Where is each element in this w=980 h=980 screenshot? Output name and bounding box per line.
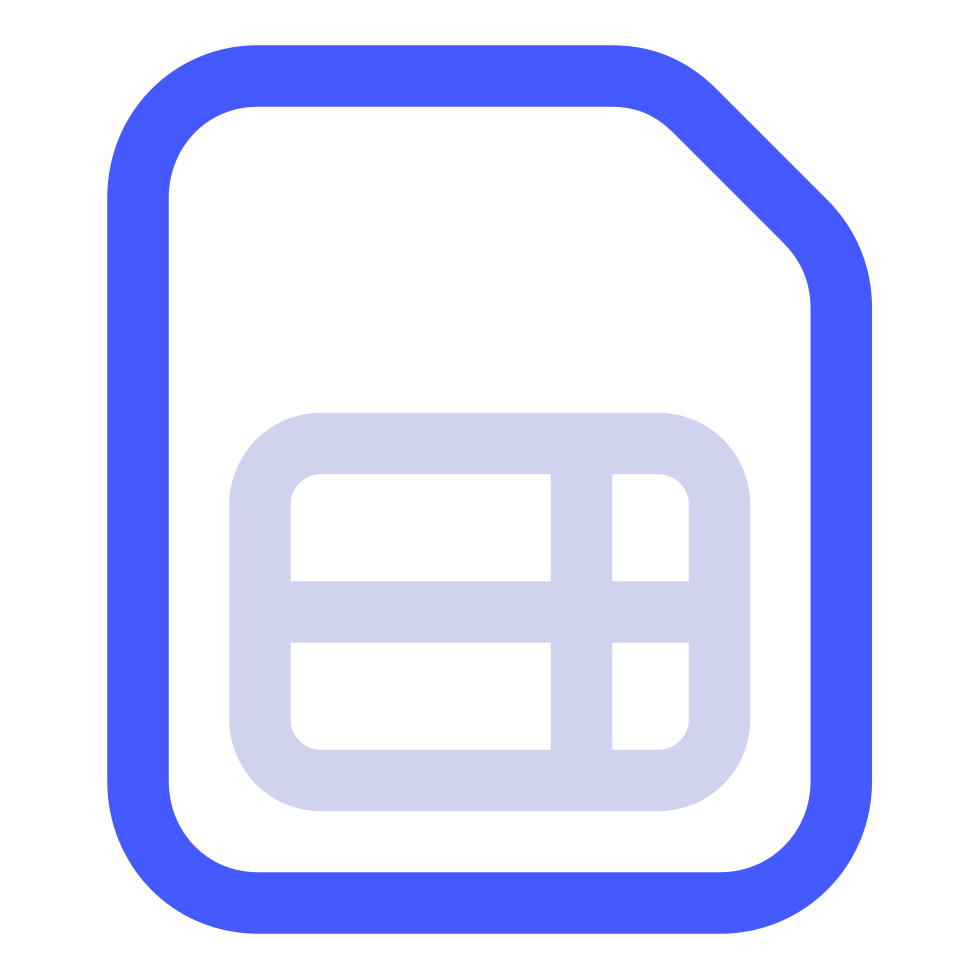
SIM chip [260, 444, 720, 780]
chip vertical bar [551, 444, 612, 780]
chip horizontal bar [260, 581, 720, 643]
chip outer frame [260, 444, 720, 780]
SIM card outline [138, 76, 841, 903]
